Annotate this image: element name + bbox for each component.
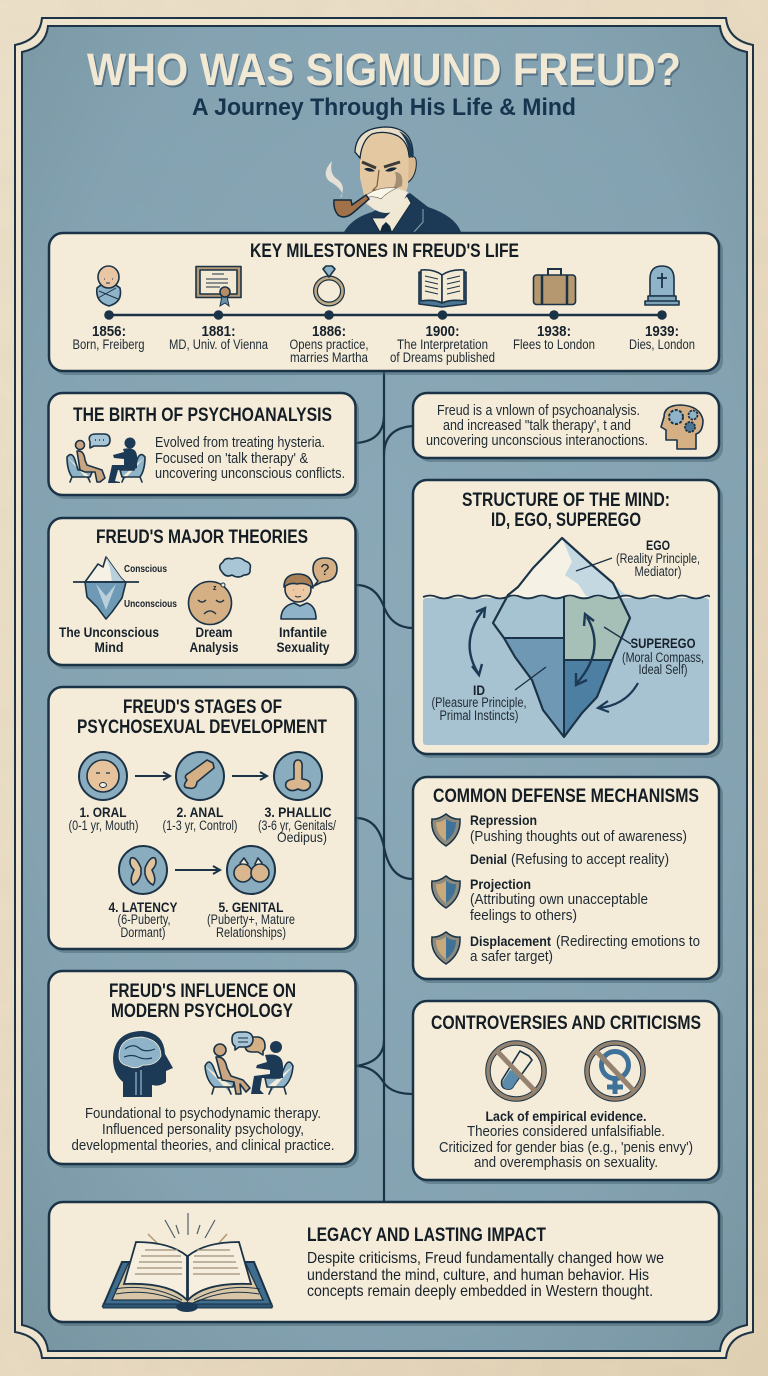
text: controversies description: Criticized for gender bias (e.g., 'penis envy') [439, 1140, 693, 1156]
label: stage 2: 2. ANAL [176, 804, 224, 820]
text: birth description: uncovering unconscious conflicts. [155, 466, 345, 482]
text: displacement [470, 933, 700, 965]
milestone 1881: 1881: [202, 323, 236, 340]
heading: structure [462, 490, 670, 531]
text: intro note: Freud is a vnlown of psychoanalysis. [437, 403, 640, 419]
label: unconscious: Unconscious [124, 599, 177, 610]
icon: diploma [196, 266, 241, 306]
label: stage 3: Oedipus) [277, 830, 327, 845]
panel: influence on modern psychology [48, 971, 359, 1168]
heading: defense: COMMON DEFENSE MECHANISMS [433, 786, 699, 807]
milestone 1938: Flees to London [513, 337, 595, 352]
icon: open book [419, 270, 466, 307]
milestone 1938 [513, 323, 595, 352]
text: displacement: a safer target) [470, 949, 553, 965]
milestone 1886 [290, 323, 368, 365]
text: displacement: Displacement [470, 933, 551, 949]
label: stage 4: 4. LATENCY [108, 899, 178, 915]
milestone 1856: Born, Freiberg [72, 337, 144, 352]
arrow: id cycle [470, 608, 485, 675]
icon: shield displacement [432, 932, 460, 964]
text: influence description [72, 1106, 334, 1154]
icon: child with question bubble [281, 558, 337, 619]
text: legacy description: understand the mind, culture, and human behavior. His [307, 1267, 649, 1284]
text: repression: Repression [470, 812, 537, 828]
central connector lines [356, 371, 413, 1202]
label: stage 4: (6-Puberty, [118, 912, 170, 927]
text: birth description: Evolved from treating hysteria. [155, 435, 325, 451]
icon: head with gears [661, 405, 703, 449]
text: projection [470, 876, 648, 924]
ear [405, 156, 416, 184]
label: id [432, 682, 526, 723]
heading: influence: FREUD'S INFLUENCE ON [109, 981, 296, 1002]
icon: sleeping face and dream cloud: z [213, 585, 217, 592]
water background [423, 598, 709, 745]
icon: therapy session [67, 434, 145, 483]
heading: influence: MODERN PSYCHOLOGY [111, 1001, 293, 1022]
label: ego [616, 537, 700, 579]
text: influence description: Influenced personality psychology, [102, 1122, 304, 1138]
label: conscious: Conscious [124, 564, 167, 575]
icon: smoke [326, 161, 343, 198]
label: superego: Ideal Self) [638, 662, 688, 677]
label: stage 5: 5. GENITAL [218, 899, 284, 915]
text: birth description: Focused on 'talk therapy' & [155, 451, 308, 467]
collar [372, 196, 411, 232]
label: stage 3: (3-6 yr, Genitals/ [258, 818, 336, 833]
icon: sleeping face and dream cloud [188, 558, 250, 624]
icon: open book with rays [103, 1213, 272, 1312]
text: legacy description: Despite criticisms, Freud fundamentally changed how we [307, 1250, 664, 1267]
text: legacy description [307, 1250, 664, 1300]
icon: baby [97, 266, 121, 306]
label: stage 5 [207, 899, 295, 940]
milestone 1886: 1886: [312, 323, 346, 340]
text: intro note [426, 403, 648, 449]
milestone 1939: 1939: [645, 323, 679, 340]
hair [355, 127, 413, 158]
milestone 1886: marries Martha [290, 350, 368, 365]
icon: therapy conversation [205, 1032, 293, 1094]
icon: pipe [334, 195, 369, 217]
timeline line [104, 310, 667, 320]
label: ego: EGO [646, 537, 670, 553]
label: stage 2 [162, 804, 238, 833]
icon: child with question bubble: ? [321, 562, 330, 579]
label: infantile sexuality: Sexuality [276, 639, 330, 655]
label: stage 4: Dormant) [120, 925, 166, 940]
text: controversies description: and overemphasis on sexuality. [474, 1155, 658, 1171]
heading: structure: STRUCTURE OF THE MIND: [462, 490, 670, 511]
icon: ring [316, 266, 342, 304]
label: dream analysis: Analysis [190, 639, 239, 655]
text: intro note: uncovering unconscious interanoctions. [426, 433, 648, 449]
label: dream analysis: Dream [196, 624, 232, 640]
panel: defense mechanisms [413, 777, 723, 983]
milestone 1939 [629, 323, 695, 352]
label: stage 1 [68, 804, 138, 833]
brows and eyes [362, 162, 400, 168]
arrow: latency to genital [175, 866, 220, 874]
text: projection: Projection [470, 876, 531, 892]
panel: psychosexual stages [48, 687, 359, 953]
leader lines [515, 558, 631, 690]
text: birth description [155, 435, 345, 482]
milestone 1900: 1900: [426, 323, 460, 340]
arrow: anal to phallic [232, 772, 267, 780]
label: infantile sexuality [276, 624, 330, 655]
portrait: Freud with pipe [344, 127, 461, 232]
text: controversies description: Theories considered unfalsifiable. [467, 1124, 665, 1140]
label: id: ID [473, 682, 485, 698]
label: stage 3: 3. PHALLIC [264, 804, 332, 820]
heading: legacy: LEGACY AND LASTING IMPACT [307, 1225, 546, 1246]
arrow: lower right [598, 683, 638, 712]
face [360, 131, 409, 212]
milestone 1900 [390, 323, 495, 365]
icon: brain in head [113, 1031, 173, 1097]
icon: shield projection [432, 876, 460, 908]
panel: major theories [48, 518, 359, 669]
text: denial [470, 851, 669, 868]
label: stage 1: (0-1 yr, Mouth) [68, 818, 138, 833]
label: superego: SUPEREGO [630, 635, 696, 651]
milestone 1939: Dies, London [629, 337, 695, 352]
panel: legacy [49, 1202, 723, 1326]
text: controversies description [439, 1108, 693, 1171]
text: repression [470, 812, 687, 845]
text: controversies description: Lack of empirical evidence. [486, 1108, 646, 1124]
panel: intro note [413, 393, 723, 462]
icon: shield repression [432, 814, 460, 846]
label: id: (Pleasure Principle, [432, 695, 526, 710]
title: WHO WAS SIGMUND FREUD? [87, 44, 681, 95]
icon: no female symbol [587, 1043, 643, 1099]
label: superego: (Moral Compass, [622, 650, 704, 665]
text: displacement: (Redirecting emotions to [556, 934, 700, 950]
text: projection: (Attributing own unacceptable [470, 892, 648, 908]
stage 3 phallic icon [274, 752, 322, 800]
label: stage 5: Relationships) [216, 925, 286, 940]
text: intro note: and increased "talk therapy', t and [443, 418, 631, 434]
panel: structure of the mind [413, 480, 723, 758]
milestone 1881 [169, 323, 268, 352]
text: denial: (Refusing to accept reality) [511, 852, 669, 868]
heading: stages: FREUD'S STAGES OF [123, 697, 282, 718]
label: stage 4 [108, 899, 178, 940]
waterline [423, 596, 709, 598]
label: infantile sexuality: Infantile [279, 624, 327, 640]
face shadow [392, 172, 402, 190]
text: influence description: developmental theories, and clinical practice. [72, 1138, 334, 1154]
label: stage 1: 1. ORAL [80, 804, 127, 820]
stage 5 genital icon [227, 846, 275, 894]
milestone 1900: The Interpretation [397, 337, 488, 352]
heading: milestones: KEY MILESTONES IN FREUD'S LIFE [250, 241, 519, 262]
milestone 1886: Opens practice, [290, 337, 368, 352]
heading: birth: THE BIRTH OF PSYCHOANALYSIS [73, 405, 332, 426]
milestone 1938: 1938: [537, 323, 571, 340]
iceberg diagram [493, 538, 630, 737]
label: ego: Mediator) [634, 564, 682, 579]
text: influence description: Foundational to psychodynamic therapy. [85, 1106, 321, 1122]
subtitle: A Journey Through His Life & Mind [192, 94, 576, 121]
label: stage 3 [258, 804, 336, 845]
label: the unconscious mind [59, 624, 159, 655]
arrow: superego cycle [576, 614, 595, 685]
beard [364, 188, 408, 213]
coat [344, 193, 461, 232]
text: legacy description: concepts remain deeply embedded in Western thought. [307, 1283, 653, 1300]
label: the unconscious mind: The Unconscious [59, 624, 159, 640]
heading: theories: FREUD'S MAJOR THEORIES [96, 527, 308, 548]
label: superego [622, 635, 704, 677]
heading: stages [77, 697, 327, 738]
label: id: Primal Instincts) [440, 708, 518, 723]
milestone 1900: of Dreams published [390, 350, 495, 365]
stage 1 oral icon [79, 752, 127, 800]
heading: stages: PSYCHOSEXUAL DEVELOPMENT [77, 717, 327, 738]
label: ego: (Reality Principle, [616, 551, 700, 566]
panel: controversies [413, 1001, 723, 1184]
heading: controversies: CONTROVERSIES AND CRITICISMS [431, 1013, 701, 1034]
arrow: oral to anal [135, 772, 170, 780]
text: denial: Denial [470, 851, 507, 867]
icon: gravestone [645, 266, 679, 305]
label: stage 5: (Puberty+, Mature [207, 912, 295, 927]
milestone 1856: 1856: [92, 323, 126, 340]
heading: structure: ID, EGO, SUPEREGO [491, 510, 641, 531]
panel: birth of psychoanalysis [48, 393, 359, 499]
heading: influence [109, 981, 296, 1022]
stage 2 anal icon [176, 752, 224, 800]
label: the unconscious mind: Mind [94, 639, 124, 655]
title: WHO WAS SIGMUND FREUD? [88, 46, 682, 97]
panel: key milestones [49, 233, 723, 375]
stage 4 latency icon [119, 846, 167, 894]
milestone 1856 [72, 323, 144, 352]
icon: suitcase [534, 269, 576, 304]
milestone 1881: MD, Univ. of Vienna [169, 337, 268, 352]
label: stage 2: (1-3 yr, Control) [162, 818, 238, 833]
icon: small iceberg [73, 557, 139, 619]
icon: no test tube [488, 1043, 544, 1099]
label: dream analysis [190, 624, 239, 655]
text: projection: feelings to others) [470, 908, 577, 924]
text: repression: (Pushing thoughts out of awareness) [470, 829, 687, 845]
